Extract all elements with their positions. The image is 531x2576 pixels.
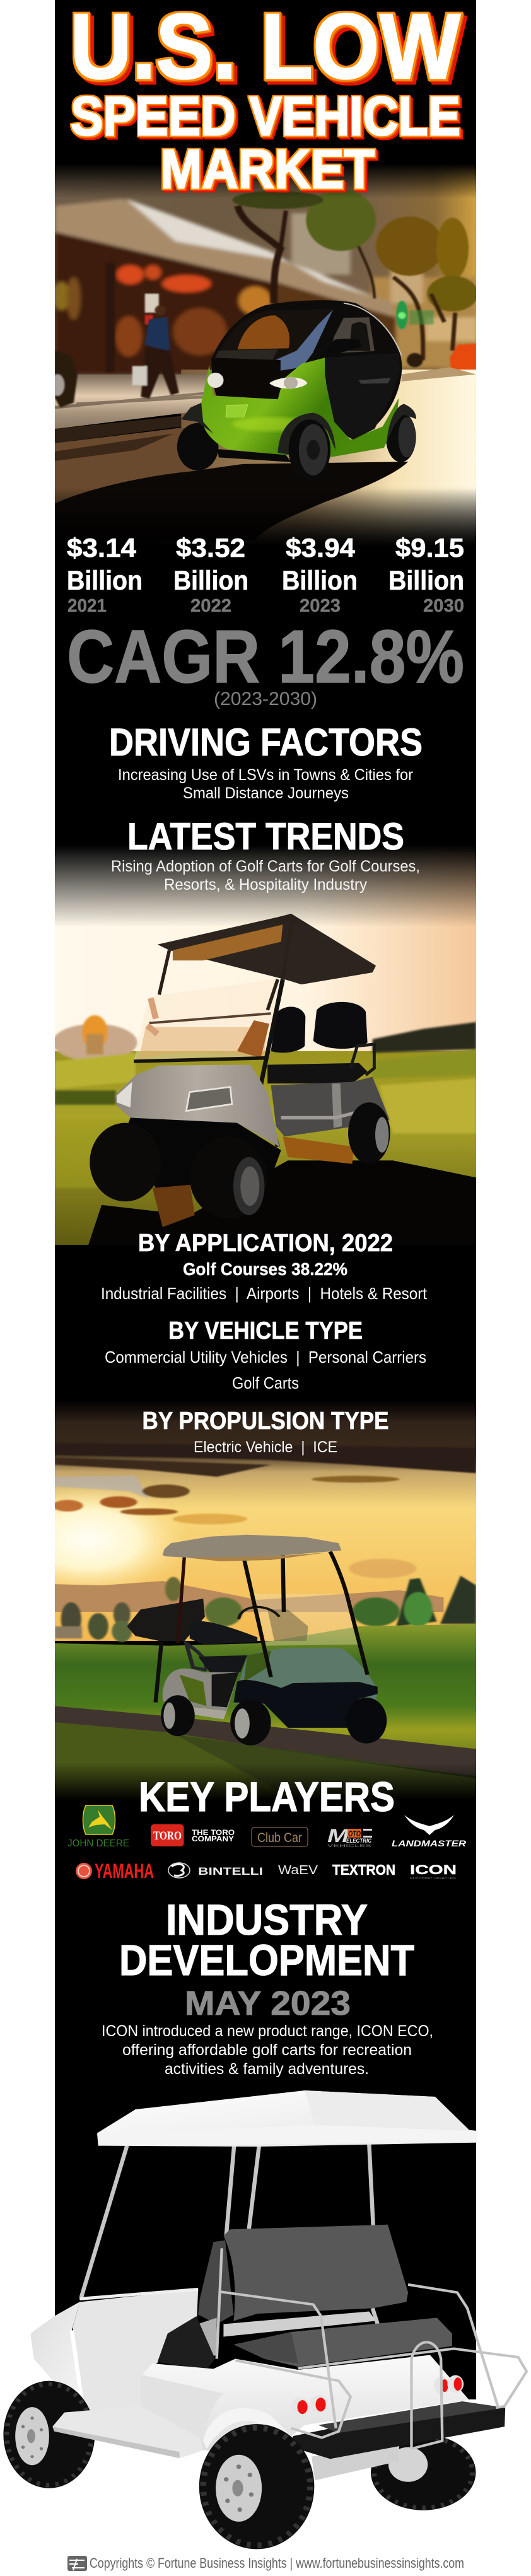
industry development: activities & family adventures.	[165, 2060, 369, 2078]
cart roof	[163, 1535, 341, 1558]
by application: Golf Courses 38.22%	[183, 1259, 347, 1279]
driving factors: Increasing Use of LSVs in Towns & Cities for	[118, 766, 413, 784]
logo: Moto Electric: VEHICLES	[327, 1845, 371, 1848]
far rear wheel	[371, 2435, 476, 2510]
industry development: ICON introduced a new product range, ICON ECO,	[102, 2022, 433, 2040]
market value 2021	[67, 533, 143, 616]
vehicle cabin	[212, 300, 402, 440]
logo: ICON	[410, 1863, 457, 1880]
market value 2022: 2022	[190, 596, 231, 616]
logo: Moto Electric	[327, 1826, 372, 1848]
logo: Textron: TEXTRON	[332, 1862, 395, 1878]
key players heading: KEY PLAYERS	[139, 1773, 395, 1820]
logo: Bintelli: BINTELLI	[198, 1865, 263, 1877]
logo: Landmaster: LANDMASTER	[392, 1838, 467, 1848]
cart windshield	[134, 979, 277, 1061]
by application: Industrial Facilities | Airports | Hotels & Resort	[101, 1284, 428, 1303]
tree line	[55, 1576, 476, 1642]
cart hood	[115, 1064, 279, 1147]
by application: BY APPLICATION, 2022	[138, 1230, 393, 1257]
title: SPEED VEHICLE	[71, 86, 460, 147]
logo: Moto Electric: OTO	[348, 1829, 361, 1838]
market value 2022	[173, 533, 248, 616]
logo: John Deere	[67, 1805, 129, 1849]
vehicle rear wheel	[386, 412, 416, 462]
logo: John Deere: JOHN DEERE	[67, 1838, 129, 1849]
photo: golf cart on fairway	[52, 846, 476, 1246]
CAGR: CAGR 12.8%	[67, 615, 464, 699]
cart wheels	[161, 1695, 195, 1736]
floor interior	[169, 2317, 217, 2356]
market value 2023	[282, 533, 358, 616]
by application	[101, 1230, 428, 1303]
industry development: MAY 2023	[185, 1984, 351, 2022]
market value 2022: Billion	[173, 566, 248, 596]
logo: Toro	[151, 1824, 235, 1846]
title: MARKET	[160, 139, 375, 200]
by vehicle type: Golf Carts	[232, 1373, 299, 1392]
market value 2030	[388, 533, 464, 616]
by vehicle type	[105, 1317, 426, 1392]
vehicle front wheel	[289, 419, 330, 463]
cart windshield	[254, 1594, 359, 1646]
logo: Bintelli	[168, 1863, 263, 1878]
cart nose	[234, 1648, 378, 1706]
trees	[232, 189, 478, 374]
industry development: INDUSTRY	[166, 1896, 368, 1944]
grass	[55, 1624, 476, 1757]
road right	[181, 370, 476, 545]
vehicle green body	[201, 358, 399, 457]
rails	[217, 2248, 527, 2449]
latest trends: Resorts, & Hospitality Industry	[164, 876, 367, 894]
vehicle left wheel	[177, 423, 218, 470]
cart undercarriage	[122, 1117, 281, 1188]
cylinder under bumper	[312, 2442, 400, 2480]
logo: ICON: ELECTRIC VEHICLES	[410, 1877, 456, 1880]
cart side	[163, 1669, 239, 1711]
vehicle windshield	[216, 309, 334, 360]
lower seat	[234, 2317, 452, 2367]
dash	[158, 2316, 215, 2370]
white golf cart illustration	[3, 2090, 527, 2549]
market value 2023: 2023	[300, 596, 341, 616]
market value 2030: Billion	[388, 566, 464, 596]
cowl	[73, 2289, 198, 2413]
latest trends	[111, 815, 420, 894]
market value 2030: 2030	[423, 596, 464, 616]
front wheel	[3, 2381, 95, 2488]
logo: Moto Electric: M	[327, 1826, 349, 1846]
by propulsion type	[143, 1407, 388, 1456]
by propulsion type: Electric Vehicle | ICE	[194, 1438, 337, 1456]
driving factors: Small Distance Journeys	[183, 784, 349, 802]
cart front wheels	[90, 1123, 161, 1201]
vehicle underside	[218, 449, 291, 462]
vehicle headlights	[207, 373, 224, 388]
street shadow	[55, 462, 408, 545]
logo: Landmaster	[392, 1815, 467, 1848]
roof	[97, 2090, 477, 2147]
logo: WAEV: WaEV	[278, 1863, 318, 1877]
logo: Club Car	[252, 1827, 308, 1846]
market value 2023: Billion	[282, 566, 358, 596]
logo: Yamaha: YAMAHA	[95, 1860, 154, 1882]
footboard	[52, 2406, 203, 2458]
posts	[81, 2143, 378, 2324]
driving factors	[109, 721, 423, 802]
golf bag	[127, 1599, 205, 1641]
industry development: DEVELOPMENT	[119, 1936, 414, 1984]
footer logo	[67, 2556, 87, 2571]
cart side	[271, 1076, 390, 1136]
market value 2021: 2021	[67, 596, 107, 616]
market value 2030: $9.15	[395, 533, 464, 562]
industry development	[102, 1896, 433, 2078]
vehicle door	[325, 353, 400, 440]
vehicle fenders	[181, 403, 416, 455]
road left	[55, 428, 194, 504]
market value 2023: $3.94	[286, 533, 356, 562]
bumper	[292, 2401, 505, 2459]
industry development: offering affordable golf carts for recreation	[122, 2041, 412, 2059]
latest trends: Rising Adoption of Golf Carts for Golf Courses,	[111, 858, 420, 875]
logo: Toro: THE TORO	[192, 1828, 235, 1837]
rear wheel	[199, 2424, 314, 2549]
driving factors: DRIVING FACTORS	[109, 721, 423, 764]
seat back	[198, 2241, 234, 2324]
title	[70, 0, 460, 200]
image fades	[55, 164, 476, 199]
market value 2022: $3.52	[176, 533, 245, 562]
sidewalk	[55, 375, 209, 429]
logo: Toro: COMPANY	[192, 1834, 234, 1843]
photo: low speed vehicle on city street	[51, 161, 478, 545]
tail lights	[291, 2375, 464, 2416]
cart seats	[313, 1002, 368, 1049]
logo: Moto Electric: ELECTRIC	[346, 1838, 371, 1844]
seat supports	[223, 2311, 376, 2336]
cart shadow	[88, 1160, 476, 1246]
by vehicle type: BY VEHICLE TYPE	[168, 1317, 363, 1344]
cart rear wheel	[348, 1102, 390, 1164]
vehicle front mask	[211, 358, 281, 399]
logo: Club Car: Club Car	[257, 1831, 302, 1845]
cart canopy	[158, 914, 376, 984]
latest trends: LATEST TRENDS	[127, 815, 404, 858]
black background panel	[55, 0, 476, 2399]
photo: golf cart at sunset	[55, 1404, 476, 1797]
logo: Yamaha	[76, 1860, 154, 1882]
CAGR: (2023-2030)	[214, 689, 317, 709]
by propulsion type: BY PROPULSION TYPE	[143, 1407, 388, 1435]
logo: Toro: TORO	[153, 1829, 182, 1843]
image fades	[55, 845, 476, 927]
logo: ICON: ICON	[410, 1863, 457, 1877]
foreground grass	[55, 1722, 476, 1805]
pedestrian	[51, 305, 179, 407]
by vehicle type: Commercial Utility Vehicles | Personal Carriers	[105, 1348, 426, 1367]
image fades	[55, 1400, 476, 1422]
path	[55, 1706, 476, 1776]
market value 2021: $3.14	[67, 533, 137, 562]
hills	[55, 1581, 443, 1612]
market value 2021: Billion	[67, 566, 143, 596]
rear body	[141, 2355, 469, 2454]
cart seat	[190, 1621, 257, 1645]
